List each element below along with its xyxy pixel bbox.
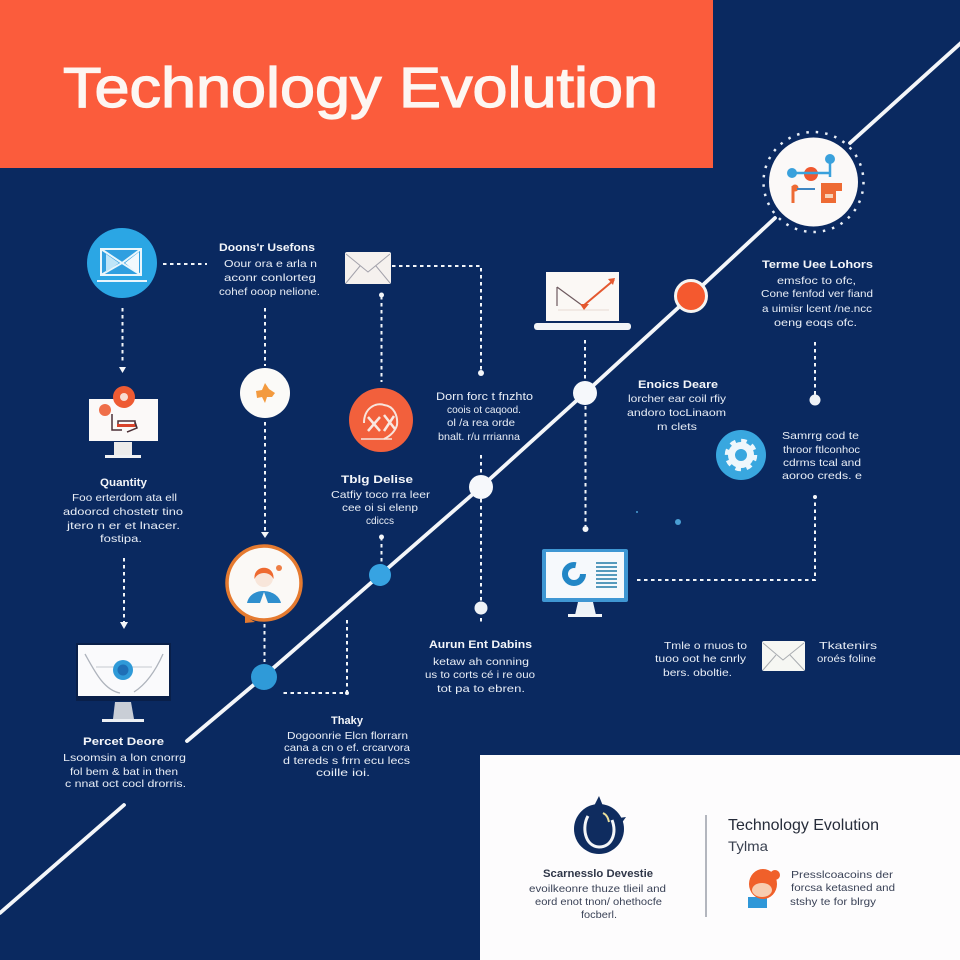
node: orange <box>676 280 706 312</box>
text: tmle block: Tmle o rnuos to <box>664 640 747 652</box>
icon: monitor donut <box>542 549 628 617</box>
text: enoics block: m clets <box>657 421 697 433</box>
icon: orange circle <box>349 388 413 452</box>
text: quantity <box>63 477 183 545</box>
icon: monitor quantity <box>89 386 158 458</box>
text: percet block: Lsoomsin a lon cnorrg <box>63 752 186 764</box>
text: thaky block: coille ioi. <box>316 767 370 779</box>
text: gear block: Samrrg cod te <box>782 430 859 442</box>
icon: envelope top <box>345 252 391 284</box>
text: enoics block: andoro tocLinaom <box>627 407 726 419</box>
legend heading: Technology Evolution <box>728 817 879 834</box>
icon: navy logo <box>574 796 626 854</box>
text: gear block: cdrms tcal and <box>783 457 861 469</box>
icon: gear circle <box>716 430 766 480</box>
text: aurun block: ketaw ah conning <box>433 656 529 668</box>
text: percet block: fol bem & bat in then <box>70 766 178 778</box>
text: tblg block: Catfiy toco rra leer <box>331 489 431 501</box>
connector lines <box>122 264 815 693</box>
text: tkatenirs block: oroés foline <box>817 653 876 665</box>
text: top left block: aconr conlorteg <box>224 272 316 284</box>
node: blue lower <box>251 664 277 690</box>
text: quantity: Foo erterdom ata ell <box>72 492 177 504</box>
text: centre upper block <box>436 391 533 443</box>
text: thaky block <box>283 715 410 779</box>
text: aurun block: us to corts cé i re ouo <box>425 669 535 681</box>
text: quantity: fostipa. <box>100 533 142 545</box>
text: aurun block <box>425 639 535 695</box>
timeline nodes <box>251 280 820 690</box>
text: thaky block: Dogoonrie Elcn florrarn <box>287 730 408 742</box>
text: gear block: aoroo creds. e <box>782 470 862 482</box>
text: top left block <box>219 242 320 298</box>
text: enoics block: lorcher ear coil rfiy <box>628 393 727 405</box>
panel: legend <box>480 755 960 960</box>
text: percet block: c nnat oct cocl drorris. <box>65 778 186 790</box>
text: tblg block <box>331 474 431 527</box>
text: scarnesslo block: evoilkeonre thuze tlieil and <box>529 883 666 895</box>
text: terme block: emsfoc to ofc, <box>777 275 856 287</box>
text: tblg block: Tblg Delise <box>341 474 413 486</box>
node: blue <box>369 564 391 586</box>
text: gear block: throor ftlconhoc <box>783 444 860 456</box>
text: enoics block <box>627 379 727 433</box>
text: scarnesslo block <box>529 868 666 921</box>
text: presslco block: stshy te for blrgy <box>790 896 877 908</box>
icon: monitor eye <box>76 643 171 722</box>
text: thaky block: Thaky <box>331 715 364 727</box>
text: thaky block: d tereds s frrn ecu lecs <box>283 755 410 767</box>
node: white centre <box>469 475 493 499</box>
title: Technology Evolution <box>63 56 658 120</box>
icon: person circle <box>227 546 301 623</box>
node: small white lower <box>474 602 488 614</box>
text: scarnesslo block: Scarnesslo Devestie <box>543 868 653 880</box>
text: enoics block: Enoics Deare <box>638 379 718 391</box>
text: terme block <box>761 259 873 329</box>
text: quantity: adoorcd chostetr tino <box>63 506 183 518</box>
text: tblg block: cdiccs <box>366 515 394 527</box>
icon: blue envelope circle <box>87 228 157 298</box>
text: tmle block <box>655 640 747 679</box>
text: presslco block <box>790 869 895 908</box>
text: tmle block: bers. oboltie. <box>663 667 732 679</box>
icon: big workflow circle <box>764 132 864 232</box>
text: tblg block: cee oi si elenp <box>342 502 418 514</box>
text: top left block: cohef ooop nelione. <box>219 286 320 298</box>
text: top left block: Oour ora e arla n <box>224 258 317 270</box>
text: centre upper block: Dorn forc t fnzhto <box>436 391 533 403</box>
text: thaky block: cana a cn o ef. crcarvora <box>284 742 410 754</box>
legend heading: Tylma <box>728 838 768 854</box>
legend heading <box>728 817 879 854</box>
text: aurun block: tot pa to ebren. <box>437 683 525 695</box>
text: tkatenirs block: Tkatenirs <box>819 640 877 652</box>
icon: laptop chart <box>534 272 631 330</box>
text: scarnesslo block: eord enot tnon/ ohethocfe <box>535 896 662 908</box>
text: terme block: Terme Uee Lohors <box>762 259 873 271</box>
node: white upper <box>573 381 597 405</box>
node: small white right <box>810 394 820 406</box>
text: terme block: a uimisr lcent /ne.ncc <box>762 303 872 315</box>
connector end markers <box>119 292 817 695</box>
icon: orange-haired person <box>748 869 780 908</box>
text: percet block <box>63 736 186 790</box>
text: aurun block: Aurun Ent Dabins <box>429 639 532 651</box>
text: tkatenirs block <box>817 640 877 665</box>
text: tmle block: tuoo oot he cnrly <box>655 653 747 665</box>
text: gear block <box>782 430 862 482</box>
small specks <box>636 511 681 525</box>
text: centre upper block: ol /a rea orde <box>447 417 515 429</box>
text: presslco block: Presslcoacoins der <box>791 869 894 881</box>
divider <box>705 815 707 917</box>
title banner <box>0 0 713 168</box>
text: presslco block: forcsa ketasned and <box>791 882 895 894</box>
text: percet block: Percet Deore <box>83 736 164 748</box>
text: scarnesslo block: focberl. <box>581 909 617 921</box>
text: centre upper block: bnalt. r/u rrrianna <box>438 431 520 443</box>
text: centre upper block: coois ot caqood. <box>447 404 521 416</box>
icon: white circle orange star <box>240 368 290 418</box>
text: terme block: oeng eoqs ofc. <box>774 317 857 329</box>
text: quantity: jtero n er et lnacer. <box>66 520 180 532</box>
icon: envelope lower <box>762 641 805 671</box>
text: top left block: Doons'r Usefons <box>219 242 315 254</box>
text: terme block: Cone fenfod ver fiand <box>761 288 873 300</box>
text: quantity: Quantity <box>100 477 148 489</box>
